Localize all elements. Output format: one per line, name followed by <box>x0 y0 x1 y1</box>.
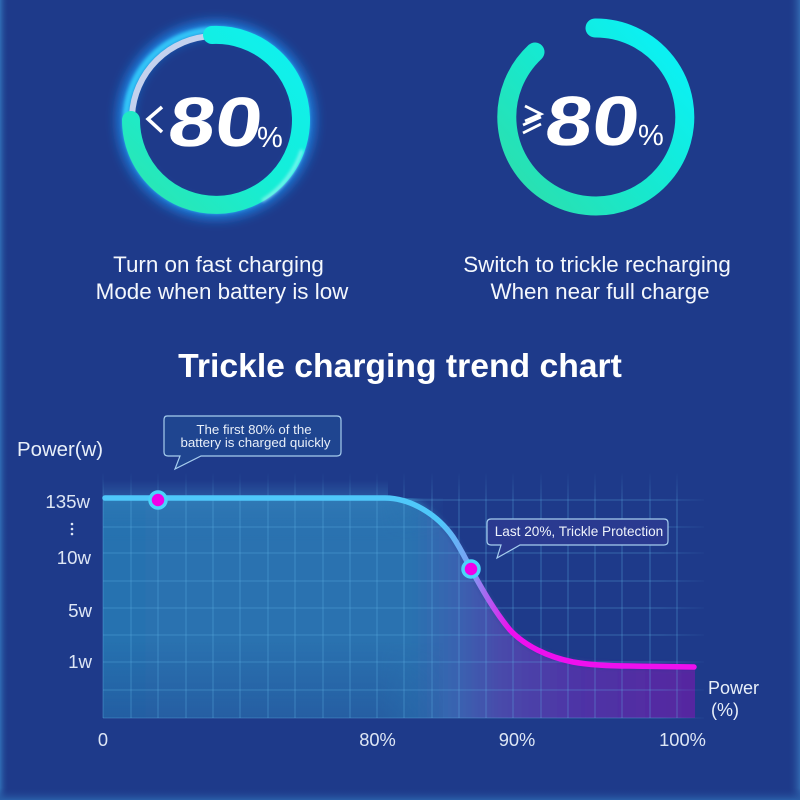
chart area fill <box>103 498 695 718</box>
ring label: less than 80%: 80 <box>164 84 267 161</box>
y axis labels: 10w <box>57 547 91 568</box>
y axis title: Power(w) <box>17 439 103 461</box>
x axis labels: 80% <box>359 729 396 750</box>
callout: first 80%: battery is charged quickly <box>180 435 331 450</box>
y axis labels: 135w <box>45 491 90 512</box>
ring label: less than 80%: % <box>257 122 283 154</box>
x axis labels: 90% <box>499 729 535 750</box>
heading: Trickle charging trend chart <box>178 347 622 385</box>
icon: ring at or above 80% <box>507 28 685 206</box>
x axis title <box>708 678 759 720</box>
x axis title: (%) <box>711 700 739 720</box>
data point: fast phase <box>150 492 166 508</box>
callout: first 80% <box>164 416 341 469</box>
x axis labels: 0 <box>98 729 108 750</box>
y axis labels <box>45 491 93 672</box>
trend curve <box>105 498 694 667</box>
text block: fast charging: Turn on fast charging <box>113 252 324 277</box>
text block: trickle recharging: Switch to trickle recharging <box>463 252 731 277</box>
x axis labels <box>98 729 706 750</box>
line chart: charging power trend <box>102 478 702 718</box>
data point: trickle phase <box>463 561 479 577</box>
x axis title: Power <box>708 678 759 698</box>
grid lines <box>103 472 704 718</box>
x axis labels: 100% <box>659 729 706 750</box>
text block: trickle recharging: When near full charge <box>490 279 710 304</box>
text block: trickle recharging <box>463 252 731 304</box>
text block: fast charging <box>96 252 349 304</box>
y axis labels: 1w <box>68 651 93 672</box>
callout: last 20% <box>487 519 668 558</box>
text block: fast charging: Mode when battery is low <box>96 279 349 304</box>
ring label: at least 80%: 80 <box>541 83 644 160</box>
callout: last 20%: Last 20%, Trickle Protection <box>495 524 663 539</box>
ring label: at least 80%: % <box>638 120 664 152</box>
y axis labels: 5w <box>68 600 93 621</box>
icon: glowing ring under 80% <box>124 28 308 212</box>
glow above flat segment <box>103 480 388 498</box>
callout: first 80%: The first 80% of the <box>196 422 312 437</box>
